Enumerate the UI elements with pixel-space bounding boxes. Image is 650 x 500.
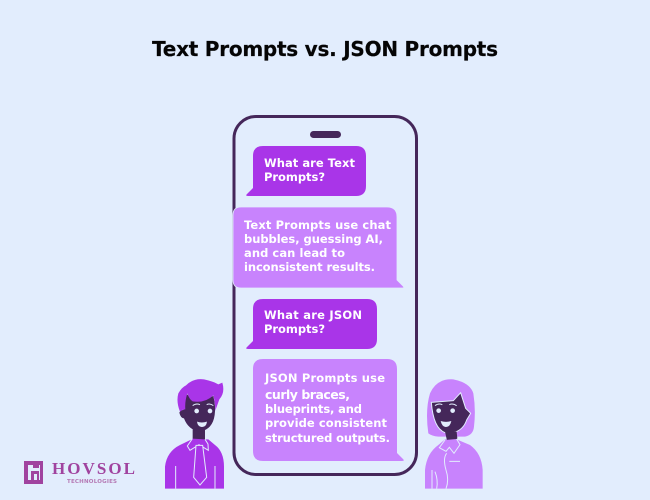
chat bubble: json prompts answer: provide consistent <box>265 416 388 430</box>
chat bubble: text prompts answer: bubbles, guessing AI, <box>244 232 383 246</box>
phone <box>234 116 416 474</box>
chat bubble: what are json prompts <box>246 299 377 349</box>
icon: man <box>165 379 224 489</box>
chat bubble: json prompts answer <box>253 359 404 461</box>
chat bubble: text prompts answer: inconsistent results. <box>244 260 375 274</box>
chat bubble: what are json prompts: What are JSON <box>264 308 362 322</box>
logo: TECHNOLOGIES <box>67 479 117 485</box>
title: Text Prompts vs. JSON Prompts <box>152 37 498 61</box>
icon: woman <box>425 379 483 489</box>
logo mark <box>24 461 43 484</box>
chat bubble: what are json prompts: Prompts? <box>264 322 325 336</box>
logo: HOVSOL <box>52 459 135 478</box>
chat bubble: what are text prompts: What are Text <box>264 156 356 170</box>
chat bubble: json prompts answer: blueprints, and <box>265 402 362 416</box>
phone notch <box>310 131 341 138</box>
chat bubble: what are text prompts <box>246 146 366 196</box>
chat bubble: json prompts answer: structured outputs. <box>265 431 390 445</box>
chat bubble: what are text prompts: Prompts? <box>264 170 325 184</box>
logo <box>24 459 135 485</box>
chat bubble: text prompts answer: and can lead to <box>244 246 345 260</box>
chat bubble: text prompts answer: Text Prompts use chat <box>244 218 392 232</box>
chat bubble: json prompts answer: curly braces, <box>265 387 350 402</box>
chat bubble: json prompts answer: JSON Prompts use <box>264 371 385 385</box>
chat bubble: text prompts answer <box>233 207 404 288</box>
